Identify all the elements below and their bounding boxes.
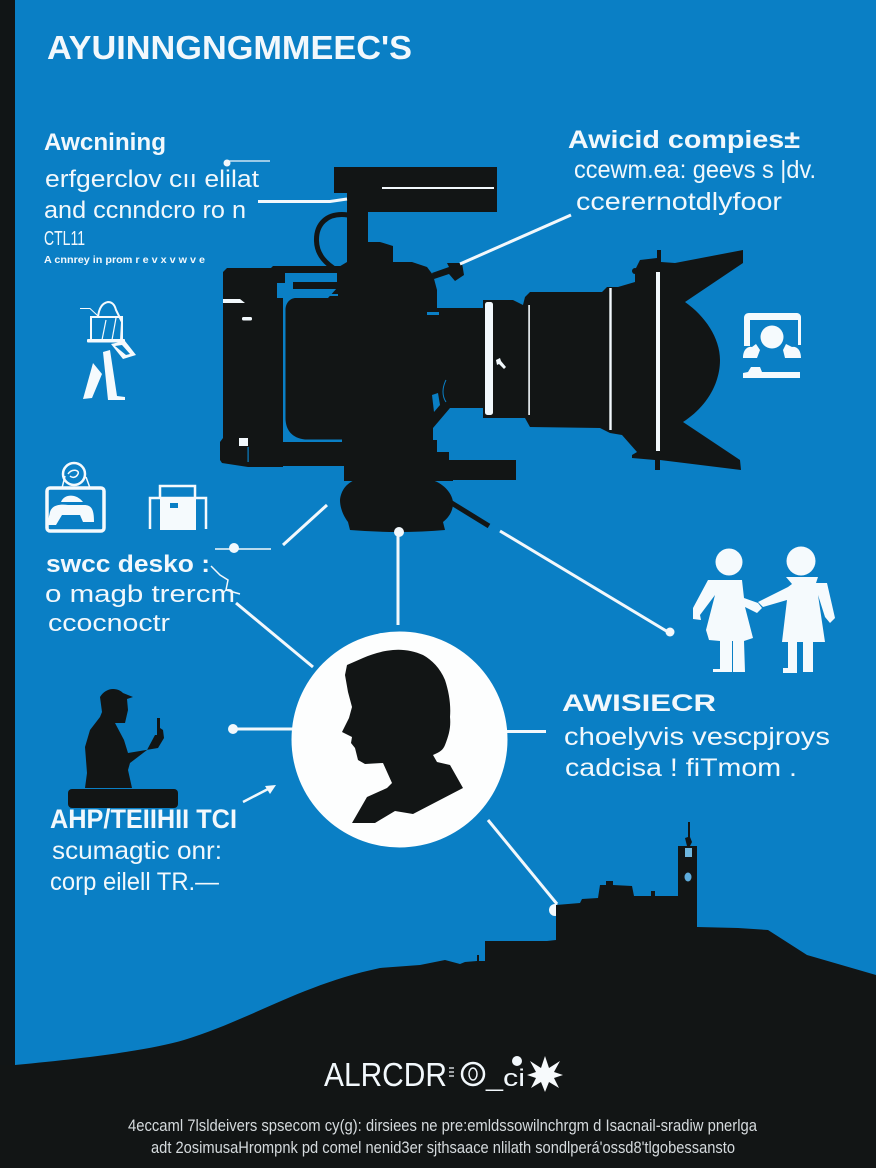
text block: top left: Awcnining xyxy=(44,129,166,156)
camera highlights xyxy=(223,187,660,451)
lens and hood xyxy=(483,250,743,470)
text block: top right: Awicid compies± xyxy=(568,126,800,154)
text block: top right: ccerernotdlyfoor xyxy=(576,188,782,216)
text block: lower left: corp eilell TR.— xyxy=(50,868,219,896)
text block: lower left: scumagtic onr: xyxy=(52,837,222,865)
text block: lower left: AHP/TEIIHII TCI xyxy=(50,804,237,834)
text block: lower right xyxy=(562,690,830,782)
camera back block xyxy=(220,266,345,467)
text block: top right xyxy=(568,126,816,216)
woman profile silhouette xyxy=(342,650,463,823)
viewfinder bar xyxy=(293,282,339,289)
footer text: 4eccaml 7lsldeivers spsecom cy(g): dirsiees ne pre:emldssowilnchrgm d Isacnail-sradiw pnerlga xyxy=(128,1116,757,1135)
text block: top right: ccewm.ea: geevs s |dv. xyxy=(574,156,816,184)
text block: top left: erfgerclov cıı elilat xyxy=(45,166,259,193)
icon: top right screen xyxy=(743,313,801,378)
title: AYUINNGNGMMEEC'S xyxy=(47,29,412,66)
text block: lower left xyxy=(50,804,237,896)
small blue details xyxy=(248,294,446,462)
footer logo: ALRCDR xyxy=(324,1056,447,1093)
text block: lower right: choelyvis vescpjroys xyxy=(564,723,830,751)
footer text: adt 2osimusaHrompnk pd comel nenid3er sjthsaace nlilath sondlperá'ossd8'tlgobessansto xyxy=(151,1138,735,1157)
text block: top left xyxy=(44,129,259,266)
text block: lower right: AWISIECR xyxy=(562,690,716,717)
text block: middle left: ccocnoctr xyxy=(48,610,170,637)
icon: briefcase xyxy=(150,486,206,530)
top handle xyxy=(334,167,497,214)
cable loop xyxy=(316,215,348,271)
camera body xyxy=(283,212,516,481)
text block: top left: and ccnndcro ro n xyxy=(44,197,246,224)
side knob xyxy=(432,263,464,281)
text block: top left: CTL11 xyxy=(44,228,85,250)
portrait circle xyxy=(292,632,508,848)
icon: framed dish xyxy=(47,463,104,531)
footer logo: _ci xyxy=(485,1065,525,1092)
tripod arm xyxy=(450,502,489,526)
footer text xyxy=(128,1116,757,1157)
icon: walking person xyxy=(80,302,136,400)
text block: top left: A cnnrey in prom r e v x v w v e xyxy=(44,255,205,266)
text block: middle left xyxy=(45,551,235,637)
footer logo xyxy=(324,1056,563,1093)
text block: middle left: swcc desko : xyxy=(46,551,210,578)
connector lines xyxy=(211,160,674,916)
text block: lower right: cadcisa ! fiTmom . xyxy=(565,754,797,782)
left black stripe xyxy=(0,0,15,1168)
skyline and ground silhouette xyxy=(0,822,876,1168)
icon: seated man silhouette xyxy=(68,689,178,808)
icon: two children holding hands xyxy=(693,546,835,673)
tripod head xyxy=(340,480,453,532)
camera silhouette xyxy=(220,167,743,532)
text block: middle left: o magb trercm xyxy=(45,581,235,608)
starburst xyxy=(527,1056,563,1092)
